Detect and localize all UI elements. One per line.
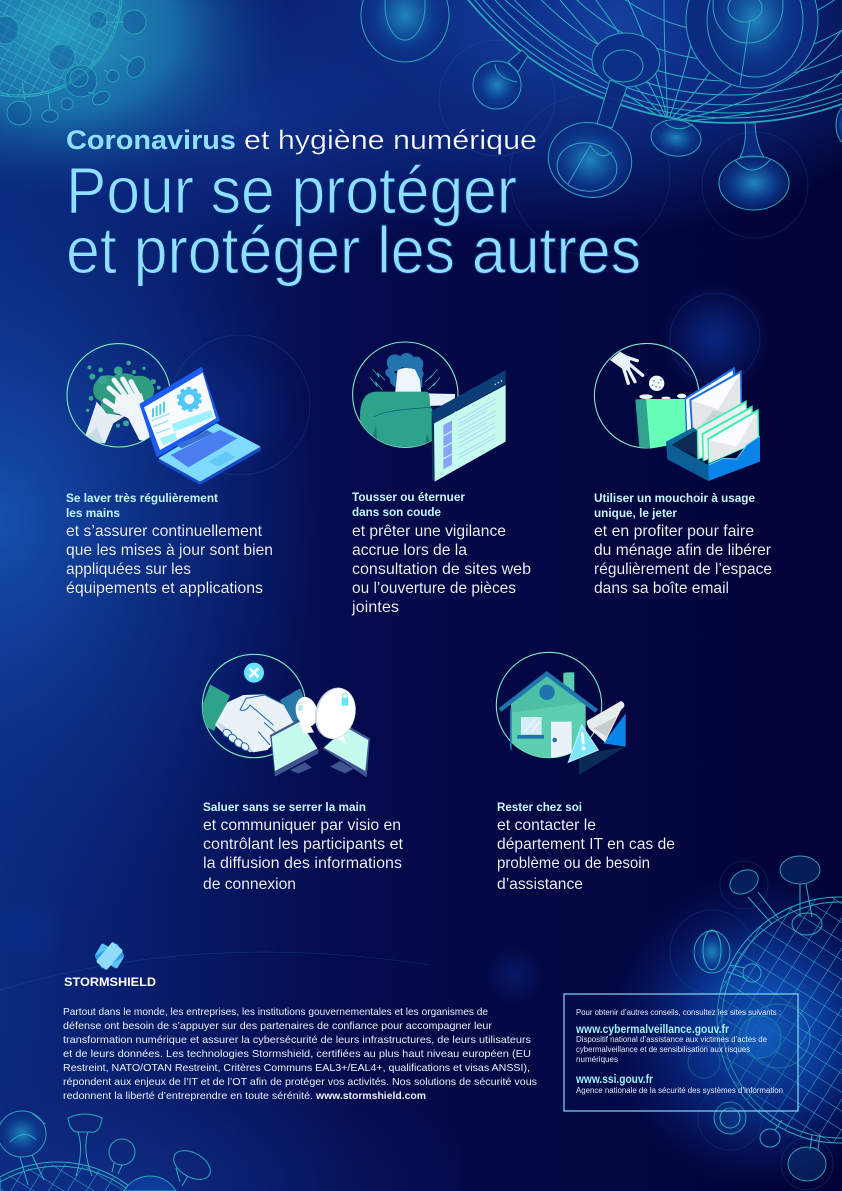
panel: useful links	[564, 994, 798, 1111]
text: se laver: équipements et applications	[66, 580, 263, 597]
panel: rester chez soi	[496, 652, 675, 893]
text block: about stormshield	[63, 1006, 537, 1102]
text: mouchoir: du ménage afin de libérer	[594, 542, 772, 559]
icon: hands and laptop	[85, 361, 261, 485]
icon: tissue box and email tray	[610, 352, 760, 481]
virus: top left sphere	[0, 0, 148, 125]
text: mouchoir	[594, 491, 772, 597]
virus: bottom left sphere	[0, 1111, 215, 1191]
link: cybermalveillance	[575, 1024, 768, 1064]
text: saluer: Saluer sans se serrer la main	[203, 800, 366, 814]
text: se laver: et s’assurer continuellement	[66, 523, 263, 540]
text: mouchoir: dans sa boîte email	[594, 580, 729, 597]
panel: se laver les mains	[66, 344, 273, 597]
text block: about stormshield: transformation numérique et assurer la cybersécurité de leurs infrastructures, de leurs utilisateurs	[63, 1034, 531, 1046]
text: tousser: et prêter une vigilance	[352, 523, 506, 540]
link: cybermalveillance: cybermalveillance et de sensibilisation aux risques	[576, 1045, 750, 1054]
link: cybermalveillance: Dispositif national d’assistance aux victimes d’actes de	[576, 1035, 768, 1044]
text: se laver: Se laver très régulièrement	[66, 491, 218, 505]
icon: house and email warning	[500, 672, 626, 775]
text: mouchoir: Utiliser un mouchoir à usage	[594, 491, 755, 505]
text: saluer	[203, 800, 404, 893]
panel: tousser dans son coude	[351, 342, 531, 616]
link: ssi	[575, 1074, 783, 1095]
text: tousser	[351, 490, 531, 616]
text: mouchoir: et en profiter pour faire	[594, 523, 754, 540]
main heading	[66, 153, 641, 287]
text block: about stormshield: et de leurs données. Les technologies Stormshield, certifiées au plus haut niveau européen (EU	[63, 1048, 531, 1060]
virus: bottom right sphere	[670, 856, 842, 1190]
logo: stormshield	[64, 942, 156, 989]
text: se laver: appliquées sur les	[66, 561, 191, 578]
panel: saluer sans se serrer la main	[197, 654, 404, 893]
text: rester chez soi: département IT en cas de	[497, 836, 675, 853]
subtitle	[66, 125, 537, 155]
text: tousser: consultation de sites web	[352, 561, 531, 578]
text: tousser: accrue lors de la	[352, 542, 467, 559]
text: saluer: contrôlant les participants et	[203, 836, 404, 853]
text: rester chez soi	[497, 800, 675, 893]
text: rester chez soi: d’assistance	[497, 876, 583, 893]
panel: useful links: Pour obtenir d’autres conseils, consultez les sites suivants :	[576, 1008, 781, 1017]
link: ssi: www.ssi.gouv.fr	[575, 1074, 653, 1086]
text: mouchoir: régulièrement de l’espace	[594, 561, 772, 578]
text: rester chez soi: et contacter le	[497, 817, 596, 834]
link: ssi: Agence nationale de la sécurité des systèmes d’information	[576, 1086, 783, 1095]
main heading: Pour se protéger	[66, 153, 517, 227]
text: tousser: Tousser ou éternuer	[352, 490, 465, 504]
panel: mouchoir a usage unique	[594, 343, 772, 597]
text: saluer: la diffusion des informations	[203, 855, 402, 872]
main heading: et protéger les autres	[66, 213, 641, 287]
icon: star	[94, 942, 125, 970]
icon: person coughing and browser window	[360, 353, 506, 482]
text: rester chez soi: problème ou de besoin	[497, 855, 650, 872]
text: tousser: dans son coude	[352, 505, 441, 519]
title	[66, 125, 641, 287]
logo: stormshield: STORMSHIELD	[64, 977, 156, 989]
text: tousser: jointes	[351, 599, 399, 616]
text block: about stormshield: défense ont besoin de s’appuyer sur des partenaires de confiance pour accompagner leur	[63, 1020, 493, 1032]
text: tousser: ou l’ouverture de pièces	[352, 580, 516, 597]
text block: about stormshield: Restreint, NATO/OTAN Restreint, Critères Communs EAL3+/EAL4+, qualifications et visas ANSSI),	[63, 1062, 530, 1074]
subtitle: Coronavirus	[66, 125, 236, 155]
text block: about stormshield: Partout dans le monde, les entreprises, les institutions gouvernementales et les organismes de	[63, 1006, 488, 1018]
text block: about stormshield: répondent aux enjeux de l’IT et de l’OT afin de protéger vos activités. Nos solutions de sécurité vous	[63, 1076, 537, 1088]
text: saluer: et communiquer par visio en	[203, 817, 401, 834]
subtitle: et hygiène numérique	[244, 125, 537, 155]
link: cybermalveillance: www.cybermalveillance.gouv.fr	[575, 1024, 729, 1036]
text: rester chez soi: Rester chez soi	[497, 800, 582, 814]
link: cybermalveillance: numériques	[576, 1055, 618, 1064]
text: mouchoir: unique, le jeter	[594, 506, 677, 520]
virus: top right sphere	[361, 0, 842, 255]
icon: handshake and video monitors	[197, 663, 370, 777]
text: se laver	[66, 491, 273, 597]
text: saluer: de connexion	[203, 876, 296, 893]
text block: about stormshield: www.stormshield.com	[315, 1090, 426, 1102]
text: se laver: que les mises à jour sont bien	[66, 542, 273, 559]
text: se laver: les mains	[66, 506, 120, 520]
text block: about stormshield: redonnent la liberté d’entreprendre en toute sérénité.	[63, 1090, 313, 1102]
